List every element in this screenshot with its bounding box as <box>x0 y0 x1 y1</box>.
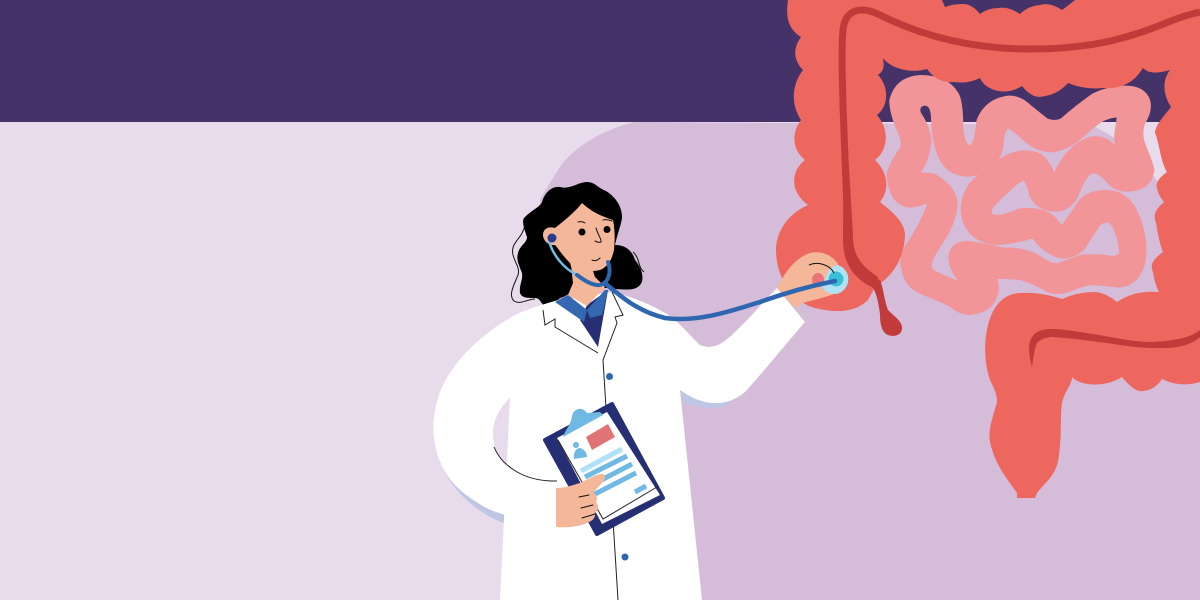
coat button line <box>603 360 618 600</box>
coat body and sleeves <box>433 288 805 600</box>
clipboard <box>545 404 663 534</box>
white coat <box>433 288 805 600</box>
chest piece outer <box>822 265 848 294</box>
ear tube dark <box>577 262 610 285</box>
stethoscope <box>548 234 835 319</box>
ear tube light <box>549 241 577 275</box>
paper back <box>557 412 660 524</box>
coat sleeve fold line <box>494 447 557 481</box>
background: darker lavender blob <box>540 122 1200 600</box>
hair <box>517 182 642 307</box>
paper edge line <box>558 440 657 519</box>
hand on stethoscope <box>777 252 848 308</box>
arm shadow <box>680 390 735 408</box>
shirt collar right <box>587 290 608 318</box>
hand on clipboard <box>556 474 605 527</box>
patient icon <box>573 442 587 459</box>
board <box>545 404 663 534</box>
button upper <box>606 373 613 380</box>
lapel outlines <box>543 292 623 360</box>
gap between fingers <box>812 273 824 287</box>
sleeve shadow <box>446 474 556 528</box>
armhole lavender gap <box>493 398 510 463</box>
button lower <box>622 554 628 560</box>
clip <box>563 409 603 437</box>
doctor <box>433 182 848 600</box>
finger lines <box>579 495 595 518</box>
brows nose and smile <box>578 220 612 261</box>
hair back outline <box>511 225 644 302</box>
colon body <box>776 0 1200 498</box>
top purple banner <box>0 0 1200 122</box>
eye left <box>578 228 586 236</box>
blue text bars <box>585 456 646 495</box>
small intestine <box>888 77 1153 313</box>
red photo box <box>586 424 615 450</box>
large intestine (colon) <box>776 0 1200 498</box>
shirt dark front <box>580 290 608 347</box>
face features <box>578 220 612 261</box>
shirt <box>555 290 608 347</box>
face and neck <box>543 203 615 306</box>
main tube <box>606 281 835 319</box>
colon dark stripe widening <box>843 133 878 289</box>
colon dark stripe upper <box>842 10 1200 283</box>
thumb crease <box>809 263 834 273</box>
appendix <box>870 277 902 336</box>
shirt collar left <box>555 295 587 322</box>
eye right <box>604 226 610 233</box>
text bars <box>581 449 622 471</box>
chest piece inner <box>828 272 844 286</box>
hand <box>777 252 838 308</box>
earpiece <box>548 234 556 242</box>
colon dark stripe lower <box>1029 329 1200 368</box>
